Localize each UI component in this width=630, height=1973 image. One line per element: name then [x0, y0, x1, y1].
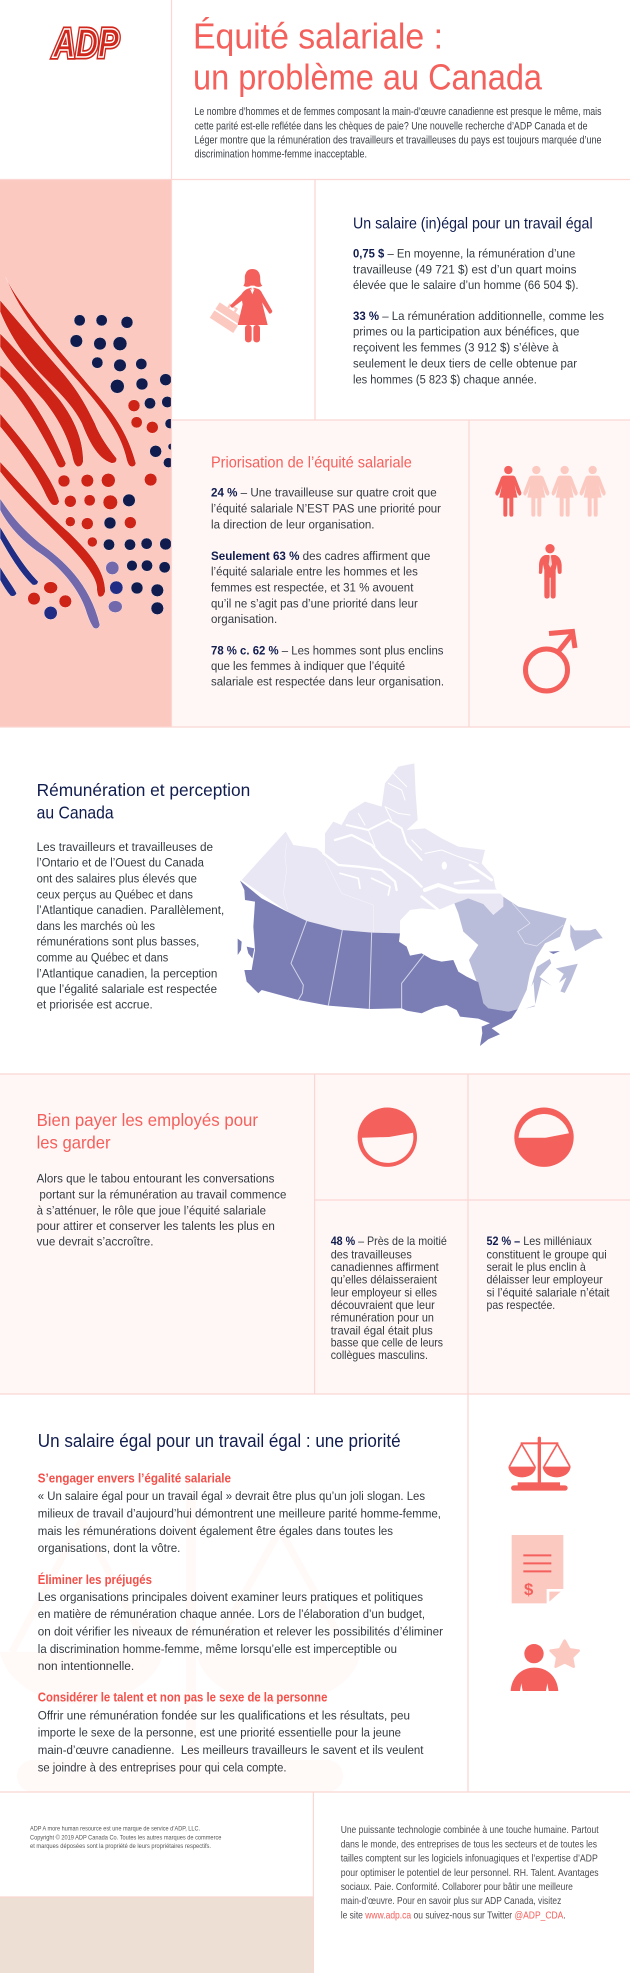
- text: about ADP: [341, 1825, 599, 1921]
- text: priority statistics: Seulement 63 % des cadres affirment que: [211, 549, 430, 563]
- text: pay statistics: travailleuse (49 721 $) est d’un quart moins: [353, 262, 576, 276]
- text: 48 percent: canadiennes affirment: [331, 1261, 439, 1274]
- text: 48 percent: des travailleuses: [331, 1248, 412, 1261]
- text: 48 percent: collègues masculins.: [331, 1349, 428, 1362]
- heading: equal pay priority: Un salaire égal pour un travail égal : une priorité: [38, 1431, 401, 1451]
- text: about ADP: sociaux. Paie. Conformité. Collaborer pour bâtir une meilleure: [341, 1882, 573, 1893]
- icon: woman with briefcase: [210, 269, 272, 342]
- text: pay to keep employees: à s’atténuer, le rôle que joue l’équité salariale: [37, 1203, 266, 1217]
- panel: footer: [0, 1825, 599, 1973]
- text: pay and perception: que l’égalité salariale est respectée: [37, 982, 217, 996]
- text: 48 percent: 48 % – Près de la moitié: [331, 1235, 447, 1248]
- map of Canada: [238, 763, 603, 1046]
- text: 52 percent: serait le plus enclin à: [486, 1261, 586, 1274]
- heading: pay and perception: Rémunération et perception: [37, 780, 250, 800]
- text: pay to keep employees: Alors que le tabou entourant les conversations: [37, 1172, 274, 1186]
- text: priority statistics: qu’il ne s’agit pas d’une priorité dans leur: [211, 596, 418, 610]
- text: 52 percent: pas respectée.: [486, 1299, 555, 1312]
- text: commit to pay equality: organisations, dont la vôtre.: [38, 1541, 180, 1555]
- text: pay to keep employees: pour attirer et conserver les talents les plus en: [37, 1219, 275, 1233]
- text: priority statistics: l’équité salariale entre les hommes et les: [211, 564, 418, 578]
- text: 52 percent: si l’équité salariale n’était: [486, 1286, 610, 1299]
- text: priority statistics: 24 % – Une travailleuse sur quatre croit que: [211, 486, 437, 500]
- text: consider talent: Considérer le talent et non pas le sexe de la personne: [38, 1690, 327, 1704]
- text: legal notice: ADP A more human resource est une marque de service d’ADP, LLC.: [30, 1826, 200, 1833]
- text: pay statistics: reçoivent les femmes (3 912 $) s’élève à: [353, 341, 559, 355]
- text: consider talent: importe le sexe de la personne, est une priorité essentielle pour la jeune: [38, 1726, 401, 1740]
- text: pay and perception: rémunérations sont plus basses,: [37, 935, 199, 949]
- text: eliminate prejudice: Éliminer les préjugés: [38, 1572, 152, 1587]
- text: pay and perception: ceux perçus au Québec et dans: [37, 887, 193, 901]
- icon: pay document: $: [524, 1580, 534, 1599]
- text: pay statistics: les hommes (5 823 $) chaque année.: [353, 372, 537, 386]
- panel: pay and perception: [37, 763, 603, 1046]
- heading: pay to keep employees: [37, 1110, 258, 1153]
- text: priority statistics: que les femmes à indiquer que l’équité: [211, 659, 405, 673]
- panel: equal pay priority: [0, 1431, 579, 1792]
- text: pay statistics: primes ou la participation aux bénéfices, que: [353, 325, 580, 339]
- text: legal notice: et marques déposées sont la propriété de leurs propriétaires respectifs.: [30, 1843, 211, 1850]
- title: un problème au Canada: [193, 56, 543, 98]
- text: commit to pay equality: milieux de travail d’aujourd’hui démontrent une meilleure parité homme-femme,: [38, 1506, 441, 1520]
- text: pay statistics: élevée que le salaire d’un homme (66 504 $).: [353, 278, 578, 292]
- panel: prioritizing pay equity: [171, 420, 630, 727]
- text: pay statistics: 33 % – La rémunération additionnelle, comme les: [353, 309, 604, 323]
- icon: pay document: [512, 1535, 563, 1603]
- text: 52 percent: constituent le groupe qui: [486, 1248, 607, 1261]
- text: 52 percent: délaisser leur employeur: [486, 1274, 603, 1287]
- text: consider talent: main-d’œuvre canadienne. Les meilleurs travailleurs le savent et ils veulent: [38, 1743, 424, 1757]
- title: Équité salariale :: [193, 16, 443, 56]
- text: commit to pay equality: [38, 1471, 441, 1555]
- text: consider talent: Offrir une rémunération fondée sur les qualifications et les résultats, peu: [38, 1708, 410, 1722]
- text: eliminate prejudice: en matière de rémunération chaque année. Lors de l’élaboration d’un budget,: [38, 1607, 425, 1621]
- text: eliminate prejudice: on doit vérifier les niveaux de rémunération et relever les possibilités d’éliminer: [38, 1624, 443, 1638]
- text: priority statistics: la direction de leur organisation.: [211, 517, 374, 531]
- panel: unequal pay: [210, 215, 604, 386]
- text: about ADP: le site www.adp.ca ou suivez-nous sur Twitter @ADP_CDA.: [341, 1910, 566, 1921]
- text: consider talent: [38, 1690, 424, 1774]
- text: priority statistics: femmes est respectée, et 31 % avouent: [211, 580, 414, 594]
- intro text: [194, 106, 602, 161]
- text: pay and perception: comme au Québec et dans: [37, 950, 168, 964]
- logo: ADP: ADP: [52, 20, 119, 66]
- heading: unequal pay: Un salaire (in)égal pour un travail égal: [353, 215, 593, 232]
- icon: balance scale: [508, 1437, 571, 1491]
- text: eliminate prejudice: [38, 1572, 443, 1673]
- text: pay and perception: l’Ontario et de l’Ouest du Canada: [37, 856, 204, 870]
- text: eliminate prejudice: non intentionnelle.: [38, 1659, 134, 1673]
- heading: pay and perception: au Canada: [37, 803, 114, 823]
- panel: header: [52, 16, 602, 161]
- text: pay and perception: l’Atlantique canadien, la perception: [37, 966, 218, 980]
- text: pay to keep employees: vue devrait s’accroître.: [37, 1235, 154, 1249]
- text: priority statistics: organisation.: [211, 612, 277, 626]
- chart: 52 percent semicircle: [514, 1108, 574, 1167]
- text: pay and perception: et priorisée est accrue.: [37, 998, 153, 1012]
- icon: person with star: [511, 1641, 579, 1691]
- text: pay to keep employees: [37, 1172, 287, 1249]
- text: pay statistics: [353, 247, 604, 386]
- text: 48 percent: [331, 1235, 447, 1362]
- text: 48 percent: découvraient que leur: [331, 1299, 435, 1312]
- text: eliminate prejudice: Les organisations principales doivent examiner leurs pratiques et politiques: [38, 1590, 423, 1604]
- text: 48 percent: basse que celle de leurs: [331, 1337, 443, 1350]
- text: priority statistics: l’équité salariale N’EST PAS une priorité pour: [211, 502, 441, 516]
- title: [193, 16, 543, 98]
- text: legal notice: [30, 1826, 222, 1850]
- icon: four women, one highlighted: [495, 466, 606, 517]
- text: 52 percent: [486, 1235, 610, 1312]
- text: about ADP: main-d’œuvre. Pour en savoir plus sur ADP Canada, visitez: [341, 1896, 561, 1907]
- text: pay and perception: l’Atlantique canadien. Parallèlement,: [37, 903, 224, 917]
- text: priority statistics: 78 % c. 62 % – Les hommes sont plus enclins: [211, 643, 444, 657]
- text: commit to pay equality: S’engager envers l’égalité salariale: [38, 1471, 231, 1486]
- heading: prioritizing pay equity: Priorisation de l’équité salariale: [211, 455, 412, 472]
- heading: pay to keep employees: les garder: [37, 1133, 111, 1153]
- text: pay and perception: Les travailleurs et travailleuses de: [37, 840, 213, 854]
- panel: pay to keep employees: [0, 1074, 630, 1394]
- text: priority statistics: [211, 486, 444, 689]
- text: eliminate prejudice: la discrimination homme-femme, même lorsqu’elle est imperceptible ou: [38, 1642, 397, 1656]
- text: 48 percent: rémunération pour un: [331, 1312, 434, 1325]
- text: commit to pay equality: mais les rémunérations doivent également être égales dans toutes les: [38, 1524, 393, 1538]
- logo: ADP: ADP: [52, 20, 119, 66]
- text: pay statistics: seulement le deux tiers de celle obtenue par: [353, 356, 577, 370]
- text: commit to pay equality: « Un salaire égal pour un travail égal » devrait être plus qu’un joli slogan. Les: [38, 1489, 425, 1503]
- text: pay and perception: [37, 840, 224, 1012]
- intro text: discrimination homme-femme inacceptable.: [194, 149, 367, 161]
- text: priority statistics: salariale est respectée dans leur organisation.: [211, 675, 444, 689]
- text: 52 percent: 52 % – Les milléniaux: [486, 1235, 592, 1248]
- text: pay and perception: ont des salaires plus élevés que: [37, 872, 197, 886]
- text: consider talent: se joindre à des entreprises pour qui cela compte.: [38, 1760, 286, 1774]
- text: pay statistics: 0,75 $ – En moyenne, la rémunération d’une: [353, 247, 575, 261]
- text: 48 percent: leur employeur si elles: [331, 1286, 437, 1299]
- heading: pay to keep employees: Bien payer les employés pour: [37, 1110, 258, 1130]
- chart: 48 percent semicircle: [358, 1108, 417, 1167]
- panel: decorative artwork: [0, 179, 175, 727]
- text: 48 percent: travail égal était plus: [331, 1324, 433, 1337]
- heading: pay and perception: [37, 780, 250, 823]
- icon: man in suit: [539, 544, 562, 599]
- text: pay and perception: dans les marchés où les: [37, 919, 155, 933]
- icon: male symbol: [526, 632, 575, 691]
- text: legal notice: Copyright © 2019 ADP Canada Co. Toutes les autres marques de commerce: [30, 1833, 222, 1841]
- watermark: balance scale: [0, 1482, 360, 1792]
- text: pay to keep employees: portant sur la rémunération au travail commence: [39, 1187, 287, 1201]
- text: 48 percent: qu’elles délaisseraient: [331, 1274, 438, 1287]
